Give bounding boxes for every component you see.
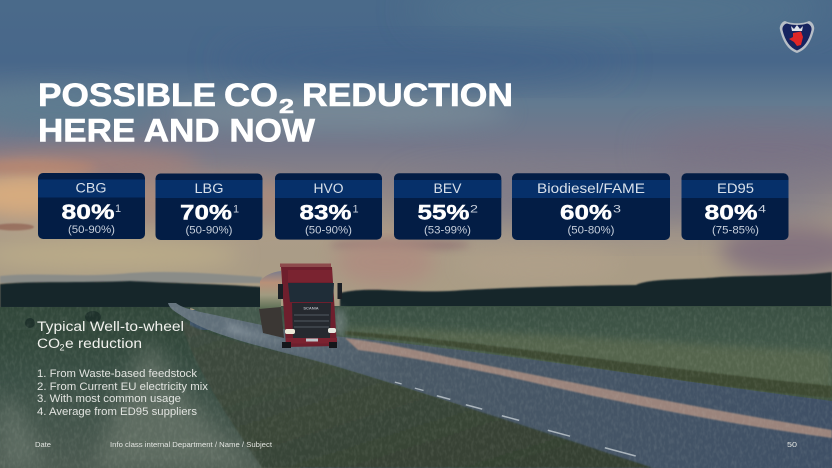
card: LBG bbox=[156, 174, 262, 240]
card: Biodiesel/FAME: 60% bbox=[560, 202, 612, 224]
road lane markings bbox=[395, 382, 636, 457]
card: HVO bbox=[275, 173, 382, 240]
card: BEV: 55% bbox=[418, 202, 470, 224]
cab bbox=[281, 267, 337, 347]
logo: Scania badge bbox=[780, 21, 814, 53]
footer: page number: 50 bbox=[787, 440, 797, 449]
card: BEV: 2 bbox=[470, 204, 478, 216]
card: LBG: LBG bbox=[194, 181, 224, 196]
card: CBG: 80% bbox=[62, 201, 115, 224]
card: BEV bbox=[394, 173, 501, 240]
subheading: Well-to-wheel bbox=[37, 319, 184, 352]
title: CO bbox=[224, 77, 278, 113]
card: CBG bbox=[38, 173, 145, 239]
card: Biodiesel/FAME: 3 bbox=[613, 204, 621, 216]
card: BEV: (53-99%) bbox=[424, 224, 471, 236]
tanker trailer bbox=[260, 271, 281, 310]
card: ED95: (75-85%) bbox=[712, 224, 759, 236]
photo background: grain overlay bbox=[0, 307, 832, 468]
card: HVO: 1 bbox=[352, 204, 359, 216]
title: REDUCTION bbox=[302, 77, 513, 113]
footnotes list: 1. From Waste-based feedstock bbox=[37, 368, 198, 380]
footer: info: Info class internal Department / Name / Subject bbox=[110, 440, 273, 449]
card: Biodiesel/FAME bbox=[512, 173, 670, 240]
truck: SCANIA bbox=[303, 306, 319, 310]
card: HVO: HVO bbox=[314, 181, 344, 196]
card: ED95 bbox=[682, 173, 788, 240]
card: LBG: (50-90%) bbox=[186, 224, 232, 236]
subheading: Well-to-wheel: e reduction bbox=[65, 336, 142, 351]
footer: date: Date bbox=[35, 440, 51, 449]
title: HERE AND NOW bbox=[38, 112, 316, 148]
title: POSSIBLE bbox=[38, 77, 216, 113]
card: Biodiesel/FAME: Biodiesel/FAME bbox=[537, 181, 645, 196]
footnotes list: 2. From Current EU electricity mix bbox=[37, 381, 209, 393]
photo background: sky bbox=[0, 0, 832, 310]
title bbox=[38, 77, 513, 148]
title: 2 bbox=[279, 96, 294, 118]
photo background: fields bbox=[0, 306, 832, 468]
card: LBG: 1 bbox=[233, 204, 239, 216]
subheading: Well-to-wheel: Typical Well-to-wheel bbox=[37, 319, 184, 334]
card: Biodiesel/FAME: (50-80%) bbox=[568, 224, 614, 236]
card: CBG: 1 bbox=[115, 203, 121, 215]
footnotes list: 3. With most common usage bbox=[37, 393, 181, 405]
card: BEV: BEV bbox=[434, 181, 462, 196]
card: HVO: (50-90%) bbox=[305, 224, 352, 236]
photo background: road bbox=[168, 303, 832, 468]
subheading: Well-to-wheel: 2 bbox=[60, 342, 65, 352]
card: ED95: 80% bbox=[704, 202, 758, 224]
card: HVO: 83% bbox=[300, 202, 352, 224]
card: LBG: 70% bbox=[180, 202, 232, 224]
card: ED95: 4 bbox=[758, 204, 766, 216]
card: ED95: ED95 bbox=[717, 181, 754, 196]
card: CBG: CBG bbox=[76, 180, 106, 196]
footnotes list: 4. Average from ED95 suppliers bbox=[37, 406, 198, 418]
photo background: roadside verge and foreground grass bbox=[0, 320, 653, 468]
subheading: Well-to-wheel: CO bbox=[37, 336, 60, 351]
photo background: tree line bbox=[0, 281, 262, 308]
footnotes list bbox=[37, 368, 209, 418]
truck bbox=[259, 264, 342, 348]
card: CBG: (50-90%) bbox=[68, 224, 115, 236]
